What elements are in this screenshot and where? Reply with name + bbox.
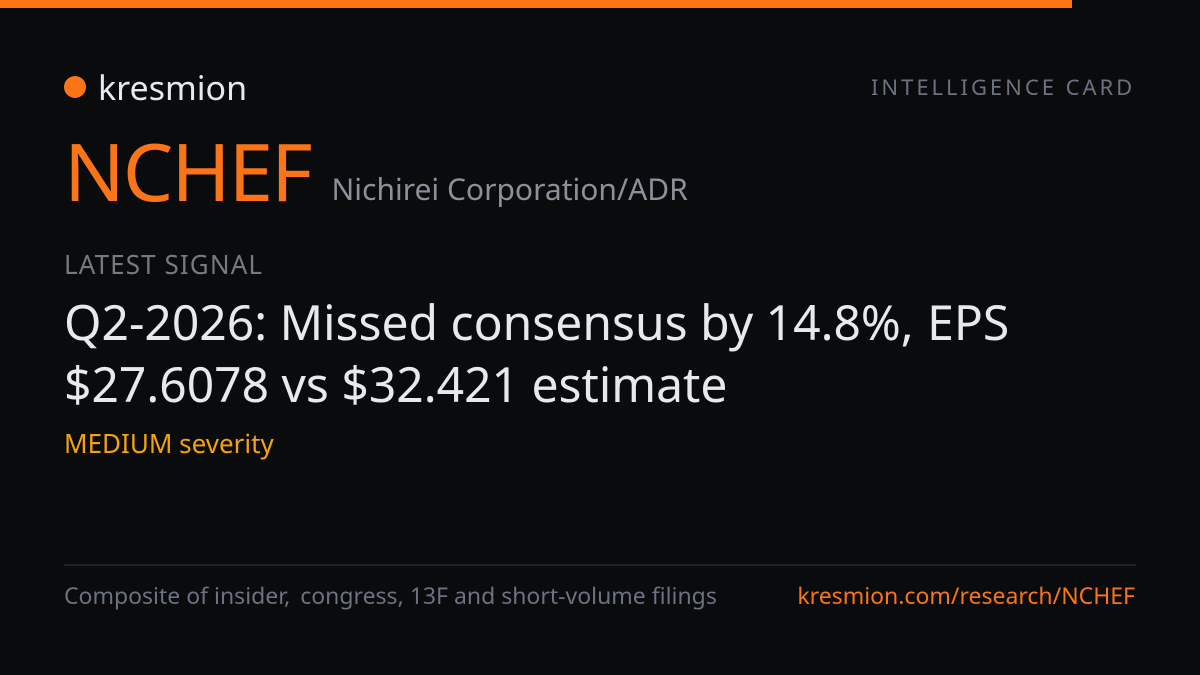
brand logo [64,64,247,110]
card label: INTELLIGENCE CARD [871,72,1135,102]
top progress bar [0,0,1072,8]
footer divider [64,564,1136,566]
signal headline [64,290,1009,417]
signal headline: $27.6078 vs $32.421 estimate [64,352,727,417]
icon: orange dot [64,76,86,98]
brand name: kresmion [98,64,247,110]
footer source: Composite of insider, congress, 13F and short-volume filings [64,579,717,611]
signal headline: Q2-2026: Missed consensus by 14.8%, EPS [64,290,1009,355]
severity: MEDIUM severity [64,425,274,461]
company name: Nichirei Corporation/ADR [332,168,688,209]
section label: LATEST SIGNAL [64,246,263,282]
ticker: NCHEF [64,116,311,225]
footer link: kresmion.com/research/NCHEF [797,579,1135,611]
